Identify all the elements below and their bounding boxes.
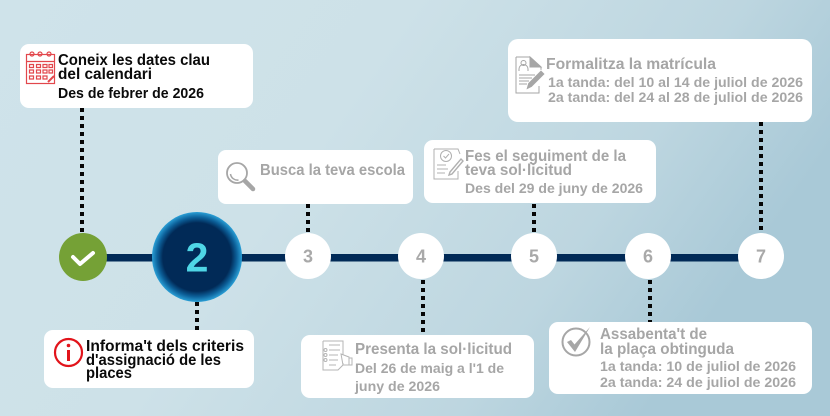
step 2: current step marker: 2 bbox=[186, 234, 208, 280]
icon: information bbox=[55, 339, 82, 366]
connectors bbox=[82, 108, 761, 335]
step 6 marker bbox=[625, 233, 671, 279]
panel: step 5 tracking bbox=[424, 140, 656, 203]
text: step 1 heading: del calendari bbox=[58, 66, 152, 83]
text: step 3 heading: Busca la teva escola bbox=[260, 162, 405, 179]
step 5 marker bbox=[511, 233, 557, 279]
step 4 marker: 4 bbox=[416, 246, 426, 266]
text: step 6 dates: 1a tanda: 10 de juliol de 2026 bbox=[600, 358, 796, 374]
step 5 marker: 5 bbox=[529, 246, 539, 266]
icon: calendar bbox=[26, 52, 54, 84]
text: step 7 heading: Formalitza la matrícula bbox=[546, 56, 716, 73]
text: step 4 dates: Del 26 de maig a l'1 de bbox=[355, 360, 504, 376]
text: step 6 dates: 2a tanda: 24 de juliol de 2026 bbox=[600, 374, 796, 390]
icon: checklist form bbox=[323, 341, 352, 370]
text: step 4 dates: juny de 2026 bbox=[354, 378, 440, 394]
step 7 marker: 7 bbox=[756, 246, 766, 266]
step 4 marker bbox=[398, 233, 444, 279]
icon: magnifier bbox=[227, 163, 253, 189]
panel: step 2 criteria bbox=[44, 330, 254, 388]
icon: check badge bbox=[562, 327, 590, 356]
text: step 2 heading: d'assignació de les bbox=[86, 352, 221, 369]
text: step 1 heading: Coneix les dates clau bbox=[58, 52, 210, 69]
panel: step 1 dates bbox=[20, 44, 253, 108]
text: step 5 heading: Fes el seguiment de la bbox=[465, 148, 626, 165]
text: step 2 heading: Informa't dels criteris bbox=[86, 338, 244, 355]
text: step 5 date: Des del 29 de juny de 2026 bbox=[465, 180, 643, 196]
panel: step 7 enrolment bbox=[508, 39, 812, 122]
text: step 4 heading: Presenta la sol·licitud bbox=[355, 341, 512, 358]
text: step 1 date: Des de febrer de 2026 bbox=[58, 86, 204, 102]
icon: enrolment document bbox=[516, 57, 545, 93]
text: step 5 heading: teva sol·licitud bbox=[465, 162, 572, 179]
panel: step 3 school search bbox=[218, 150, 413, 204]
step 3 marker: 3 bbox=[303, 246, 313, 266]
timeline line bbox=[83, 254, 761, 262]
text: step 6 heading: Assabenta't de bbox=[600, 326, 707, 343]
text: step 7 dates: 1a tanda: del 10 al 14 de juliol de 2026 bbox=[548, 74, 803, 90]
step 1: completed check marker bbox=[59, 233, 107, 281]
text: step 7 dates: 2a tanda: del 24 al 28 de juliol de 2026 bbox=[548, 89, 803, 105]
step 7 marker bbox=[738, 233, 784, 279]
text: step 2 heading: places bbox=[86, 365, 132, 382]
panel: step 4 application bbox=[301, 335, 534, 398]
icon: tracking form bbox=[434, 149, 463, 179]
text: step 6 heading: la plaça obtinguda bbox=[600, 341, 734, 358]
step 3 marker bbox=[285, 233, 331, 279]
panel: step 6 allocated place bbox=[549, 322, 812, 394]
step 2: current step marker bbox=[152, 212, 242, 302]
step 6 marker: 6 bbox=[643, 246, 653, 266]
